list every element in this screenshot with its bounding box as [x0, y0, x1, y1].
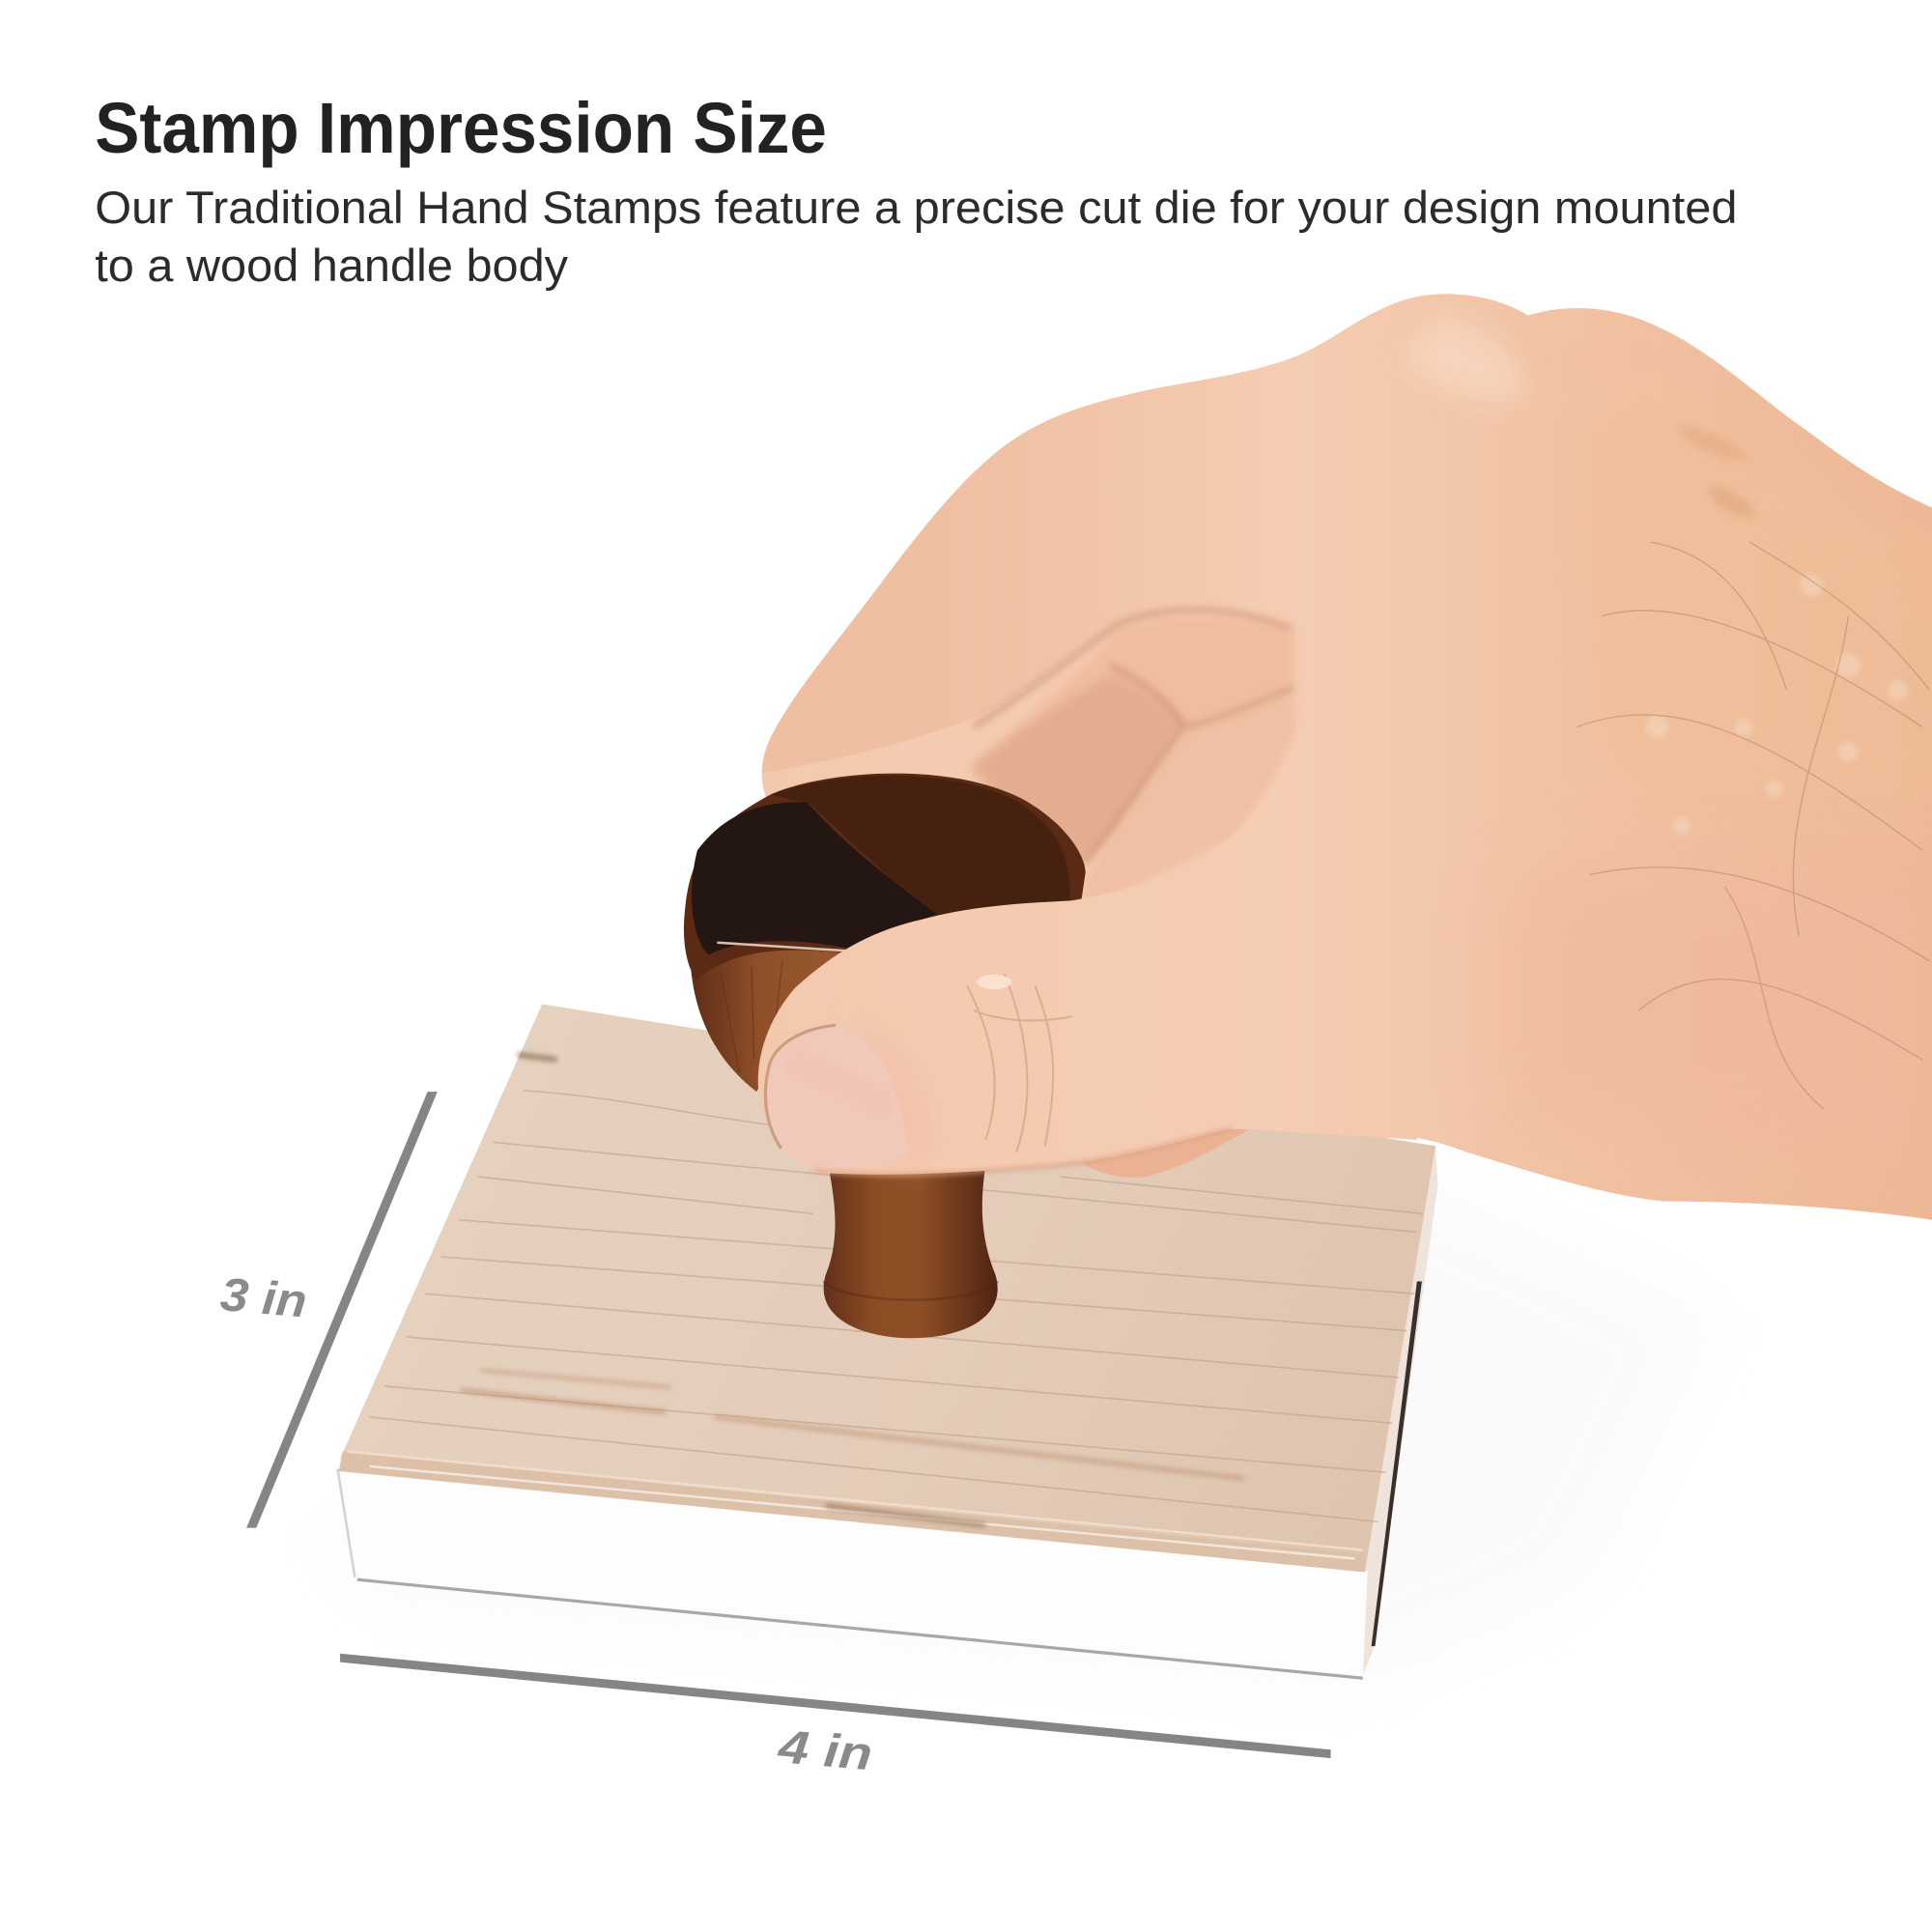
thumb lower shadow — [813, 1128, 1233, 1175]
dimension line: width — [340, 1654, 1331, 1758]
thumb knuckle creases — [967, 974, 1072, 1152]
age spots — [1681, 426, 1743, 458]
wood dark streaks — [461, 1055, 1244, 1479]
knob dark glossy face — [692, 802, 936, 955]
stamp handle post — [823, 1164, 998, 1338]
die edge on right side — [1372, 1282, 1422, 1646]
stamp knob — [684, 774, 1086, 1092]
back of hand mottling — [1577, 407, 1932, 838]
knob top rim — [684, 774, 1086, 980]
knuckle highlight — [1413, 320, 1522, 402]
description text: to a wood handle body — [95, 241, 568, 292]
wood front lip — [339, 1452, 1365, 1573]
knuckle highlight — [977, 975, 1011, 989]
index finger tone — [761, 384, 1174, 773]
knob side grain — [721, 961, 782, 1072]
finger under thumb — [1060, 1127, 1253, 1178]
wood top face — [340, 1005, 1435, 1571]
pale skin flecks — [1646, 574, 1907, 835]
white index side — [337, 1468, 1368, 1678]
wood grain — [370, 1091, 1423, 1521]
third finger tone — [1084, 690, 1296, 912]
cast shadow on table — [321, 1182, 1725, 1688]
hand: thumb — [758, 716, 1417, 1175]
knob side wood — [690, 949, 863, 1092]
description text: Our Traditional Hand Stamps feature a precise cut die for your design mounted — [95, 183, 1737, 234]
finger pad shadow — [974, 675, 1184, 863]
middle finger tone — [972, 616, 1294, 775]
thumbnail — [766, 1025, 908, 1170]
finger creases — [974, 611, 1293, 863]
hand: fingers and back — [739, 294, 1932, 1220]
knob brown face — [770, 776, 1069, 918]
dimension line: height — [246, 1092, 438, 1528]
dimension label: 3 in: 3 in — [218, 1268, 309, 1328]
stamp block — [337, 1005, 1438, 1678]
right edge — [1361, 1146, 1438, 1678]
dimension label: 4 in: 4 in — [776, 1720, 874, 1780]
arm hairs — [1577, 542, 1929, 1109]
title: Stamp Impression Size — [95, 88, 827, 168]
thumb tip pink — [850, 1016, 936, 1164]
knob highlight — [717, 943, 853, 952]
